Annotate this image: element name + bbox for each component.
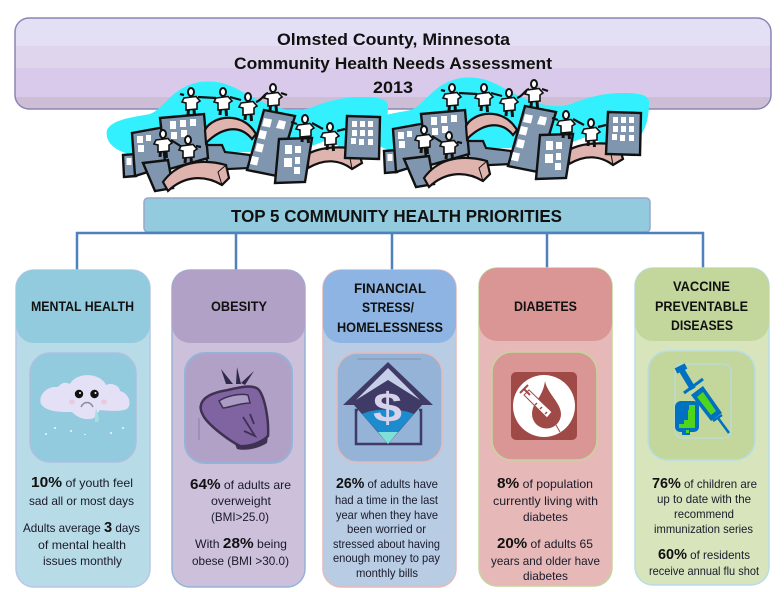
header: diabetes: DIABETES xyxy=(514,299,577,314)
stats: financial stress: been worried or xyxy=(347,522,426,536)
icon: bathroom scale xyxy=(185,353,292,463)
stats: mental health: issues monthly xyxy=(43,554,122,568)
panel: vaccine preventable diseases xyxy=(635,268,769,585)
stats: diabetes xyxy=(491,475,600,583)
panel: mental health xyxy=(16,270,150,587)
title: Olmsted County, Minnesota xyxy=(277,31,511,49)
title banner xyxy=(15,18,771,109)
illustration: people linked across city, left xyxy=(107,81,388,191)
stats: mental health xyxy=(23,474,140,568)
stats: financial stress: stressed about having xyxy=(333,537,440,551)
connector lines xyxy=(77,233,703,270)
icon: sad cloud xyxy=(30,353,136,462)
stats: obesity: (BMI>25.0) xyxy=(211,510,269,524)
stats: vaccine xyxy=(649,475,760,578)
stats: mental health: 10% of youth feel xyxy=(31,474,133,491)
panel: obesity xyxy=(172,270,305,587)
stats: mental health: sad all or most days xyxy=(29,494,134,508)
icon: blood drop and syringe xyxy=(492,352,597,460)
header: obesity: OBESITY xyxy=(211,299,267,314)
priorities banner: TOP 5 COMMUNITY HEALTH PRIORITIES xyxy=(231,206,562,226)
stats: obesity: 64% of adults are xyxy=(190,476,291,493)
stats: financial stress xyxy=(333,475,440,580)
stats: financial stress: year when they have xyxy=(336,508,438,522)
header: financial stress: FINANCIAL xyxy=(354,281,426,296)
header: vaccine: VACCINE xyxy=(673,279,730,294)
stats: mental health: of mental health xyxy=(38,538,126,552)
title xyxy=(234,31,553,97)
header: mental health xyxy=(16,270,150,343)
header: diabetes xyxy=(479,268,612,341)
header: obesity xyxy=(172,270,305,343)
stats: diabetes: diabetes xyxy=(523,510,568,524)
stats: vaccine: recommend xyxy=(674,507,734,521)
stats: financial stress: had a time in the last xyxy=(335,493,439,507)
panel: diabetes xyxy=(479,268,612,586)
stats: vaccine: immunization series xyxy=(654,522,753,536)
stats: diabetes: currently living with xyxy=(493,494,598,508)
stats: obesity: With 28% being xyxy=(195,535,287,552)
header: vaccine: DISEASES xyxy=(671,318,733,333)
header: financial stress: HOMELESSNESS xyxy=(337,320,443,335)
stats: diabetes: 20% of adults 65 xyxy=(497,535,593,552)
stats: vaccine: receive annual flu shot xyxy=(649,564,760,578)
stats: mental health: Adults average 3 days xyxy=(23,519,140,536)
stats: obesity: overweight xyxy=(211,494,272,508)
stats: vaccine: 76% of children are xyxy=(652,475,757,492)
panel: financial stress / homelessness xyxy=(323,270,456,587)
header: vaccine xyxy=(635,268,769,341)
icon: house with dollar sign: $ xyxy=(373,384,402,431)
stats: vaccine: 60% of residents xyxy=(658,546,750,563)
stats: vaccine: up to date with the xyxy=(657,492,751,506)
stats: diabetes: 8% of population xyxy=(497,475,593,492)
stats: obesity xyxy=(190,476,291,568)
header: mental health: MENTAL HEALTH xyxy=(31,299,134,314)
stats: financial stress: monthly bills xyxy=(356,566,418,580)
stats: diabetes: diabetes xyxy=(523,569,568,583)
stats: financial stress: enough money to pay xyxy=(333,551,440,565)
title: 2013 xyxy=(373,79,413,97)
illustration: people linked across city, right xyxy=(368,77,649,187)
icon: house with dollar sign xyxy=(337,353,442,462)
icon: syringe and vial xyxy=(648,351,755,460)
stats: financial stress: 26% of adults have xyxy=(336,475,438,492)
header: financial stress: STRESS/ xyxy=(362,300,414,315)
header: financial stress xyxy=(323,270,456,343)
title: Community Health Needs Assessment xyxy=(234,55,553,73)
header: vaccine: PREVENTABLE xyxy=(655,299,748,314)
stats: obesity: obese (BMI >30.0) xyxy=(192,554,289,568)
priorities banner xyxy=(144,198,650,232)
stats: diabetes: years and older have xyxy=(491,554,600,568)
